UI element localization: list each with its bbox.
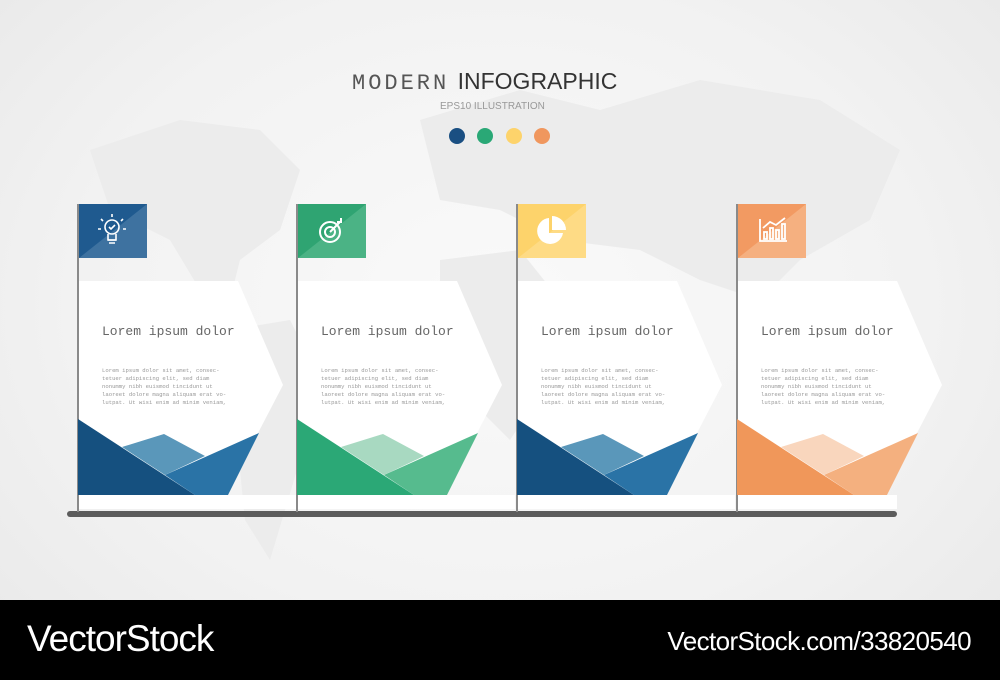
text: step 3: nonummy nibh euismod tincidunt ut [541, 383, 652, 390]
text: step 2: nonummy nibh euismod tincidunt ut [321, 383, 432, 390]
text: step 1: Lorem ipsum dolor [102, 324, 235, 339]
footer bar [0, 600, 1000, 680]
text: step 4: nonummy nibh euismod tincidunt ut [761, 383, 872, 390]
text: step 4: Lorem ipsum dolor sit amet, consec- [761, 367, 878, 374]
timeline bar [67, 511, 897, 517]
text: step 1: laoreet dolore magna aliquam erat vo- [102, 391, 226, 398]
text: step 2: tetuer adipiscing elit, sed diam [321, 375, 428, 382]
footer url: VectorStock.com/33820540 [667, 626, 971, 656]
text: step 2: Lorem ipsum dolor [321, 324, 454, 339]
text: step 1: lutpat. Ut wisi enim ad minim veniam, [102, 399, 226, 406]
text: step 2 [321, 324, 454, 406]
subtitle: EPS10 ILLUSTRATION [440, 101, 545, 112]
text: step 1: nonummy nibh euismod tincidunt ut [102, 383, 213, 390]
text: step 4: laoreet dolore magna aliquam erat vo- [761, 391, 885, 398]
title: MODERN INFOGRAPHIC [352, 68, 617, 96]
text: step 2: lutpat. Ut wisi enim ad minim veniam, [321, 399, 445, 406]
panel: step 3 [516, 204, 735, 512]
text: step 3: laoreet dolore magna aliquam erat vo- [541, 391, 665, 398]
text: step 4: tetuer adipiscing elit, sed diam [761, 375, 868, 382]
text: step 4: lutpat. Ut wisi enim ad minim veniam, [761, 399, 885, 406]
icon: flag pie chart [518, 204, 586, 258]
panel: step 4 [736, 204, 942, 512]
text: step 4: Lorem ipsum dolor [761, 324, 894, 339]
color dots [449, 128, 550, 144]
icon: flag bar chart [738, 204, 806, 258]
text: step 1: tetuer adipiscing elit, sed diam [102, 375, 209, 382]
panel: step 2 [296, 204, 515, 512]
icon: flag target [298, 204, 366, 258]
text: step 3: tetuer adipiscing elit, sed diam [541, 375, 648, 382]
text: step 3: Lorem ipsum dolor sit amet, consec- [541, 367, 658, 374]
text: step 1 [102, 324, 235, 406]
panel: step 1 [77, 204, 296, 512]
text: step 1: Lorem ipsum dolor sit amet, consec- [102, 367, 220, 374]
text: step 3 [541, 324, 674, 406]
text: step 2: laoreet dolore magna aliquam erat vo- [321, 391, 445, 398]
icon: flag lightbulb [79, 204, 147, 258]
text: step 3: Lorem ipsum dolor [541, 324, 674, 339]
footer logo: VectorStock [27, 618, 213, 659]
text: step 2: Lorem ipsum dolor sit amet, consec- [321, 367, 438, 374]
text: step 3: lutpat. Ut wisi enim ad minim veniam, [541, 399, 665, 406]
text: step 4 [761, 324, 894, 406]
